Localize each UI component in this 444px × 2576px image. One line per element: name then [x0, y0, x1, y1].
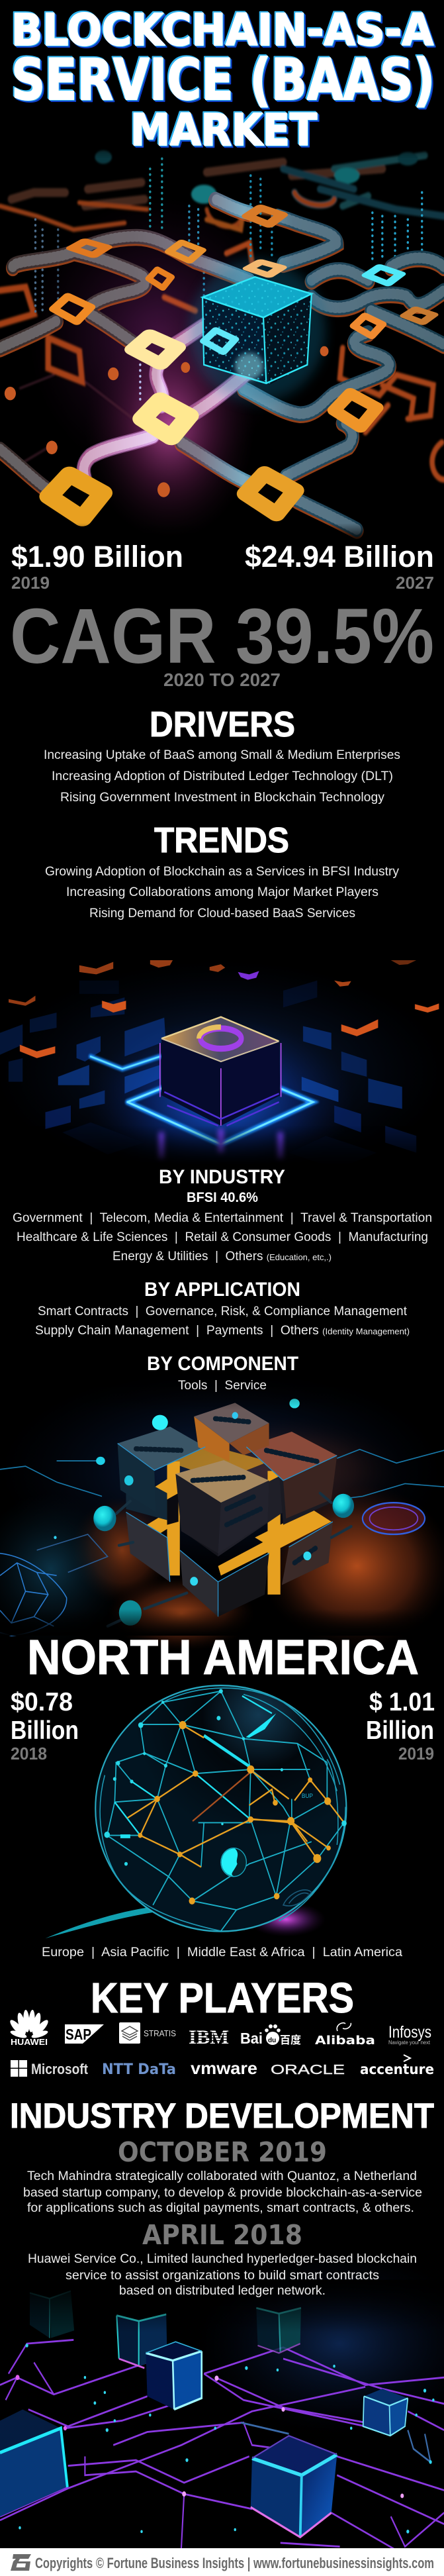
date: october 2019: OCTOBER 2019 [118, 2136, 327, 2168]
central cube [160, 1017, 281, 1160]
panel: drivers [44, 705, 400, 805]
trends list: Rising Demand for Cloud-based BaaS Services [89, 907, 355, 920]
footer bar [0, 2548, 444, 2576]
ring on cube top [199, 1027, 242, 1049]
logo: SAP: SAP [66, 2026, 91, 2043]
april 2018 description: service to assist organizations to build smart contracts [66, 2269, 379, 2283]
stat: north america 2018 [11, 1688, 79, 1763]
stat: market size 2027: 2027 [396, 573, 434, 593]
april 2018 description: Huawei Service Co., Limited launched hyperledger-based blockchain [28, 2252, 417, 2266]
application list [35, 1305, 410, 1338]
fade at bottom of cubes image [0, 1609, 444, 1636]
industry list: Healthcare & Life Sciences | Retail & Consumer Goods | Manufacturing [17, 1230, 428, 1244]
cyan network nodes [105, 1689, 347, 1866]
horizon arc [45, 1908, 159, 1938]
illustration: interlocked blockchain cubes [0, 1366, 444, 1652]
logo: accenture: accenture [360, 2061, 434, 2077]
panel: by application [35, 1279, 410, 1338]
drivers list [44, 748, 400, 805]
logo: baidu: du [268, 2037, 276, 2044]
orange network nodes [138, 1721, 331, 1905]
logo: infosys: Navigate your next [388, 2040, 431, 2046]
network lines [107, 1691, 344, 1931]
heading: by industry: BY INDUSTRY [159, 1166, 285, 1188]
panel: by component [147, 1353, 298, 1393]
logo: IBM: IBM [189, 2026, 229, 2048]
drivers list: Rising Government Investment in Blockchain Technology [60, 791, 385, 805]
panel: by industry [13, 1166, 432, 1263]
date: april 2018: APRIL 2018 [142, 2219, 302, 2251]
stat: market size 2019: $1.90 Billion [11, 540, 183, 573]
scattered dots [12, 2344, 435, 2534]
logo: infosys: Infosys [388, 2023, 431, 2042]
heading: drivers: DRIVERS [150, 705, 295, 744]
panel: key player logos [8, 2010, 434, 2078]
chain tubes [0, 199, 444, 531]
component list: Tools | Service [178, 1379, 267, 1393]
industry list [13, 1211, 432, 1263]
logo: baidu: 百度 [280, 2034, 301, 2046]
april 2018 description: based on distributed ledger network. [119, 2284, 326, 2298]
bright center cube [146, 2342, 202, 2409]
logo: huawei [8, 2010, 50, 2047]
globe body [95, 1685, 346, 1932]
trends list: Growing Adoption of Blockchain as a Services in BFSI Industry [45, 865, 399, 879]
logo: oracle: ORACLE [271, 2063, 345, 2077]
heading: trends: TRENDS [154, 820, 289, 860]
mid cube left [116, 2314, 167, 2368]
trends list: Increasing Collaborations among Major Market Players [66, 885, 378, 899]
logo: microsoft [11, 2060, 89, 2077]
faded teal cube right [256, 2308, 301, 2353]
stat: north america 2018: $0.78 [11, 1688, 73, 1716]
small orange nodes [5, 346, 328, 497]
stat: north america 2019: Billion [366, 1716, 434, 1745]
background glows [0, 1366, 444, 1652]
stat: north america 2019: 2019 [398, 1744, 434, 1763]
stat: market size 2027 [245, 540, 434, 593]
logo: baidu: Bai [240, 2030, 263, 2047]
heading: key players: KEY PLAYERS [91, 1974, 354, 2022]
panel: october 2019 development [23, 2136, 422, 2215]
april 2018 description [28, 2252, 417, 2298]
panel: trends [45, 820, 399, 920]
logo: NTT data: NTT DaTa [102, 2061, 176, 2078]
blue glow [0, 960, 444, 1187]
logo: alibaba: Alibaba [315, 2034, 375, 2048]
hero illustration: glowing blockchain network [0, 150, 444, 540]
hero fade bands [0, 132, 444, 939]
top fade over circuit [0, 2280, 444, 2332]
drivers list: Increasing Adoption of Distributed Ledger Technology (DLT) [52, 769, 393, 783]
faded teal cube [30, 2291, 74, 2338]
wireframe web [0, 1534, 108, 1636]
purple ring [363, 1503, 425, 1534]
logo: infosys [388, 2023, 431, 2046]
stat: north america 2019: $ 1.01 [369, 1688, 435, 1716]
title [11, 5, 435, 156]
panel: april 2018 development [28, 2219, 417, 2298]
october 2019 description: based startup company, to develop & provide blockchain-as-a-service [23, 2186, 422, 2200]
application list: Supply Chain Management | Payments | Others (Identity Management) [35, 1324, 410, 1338]
heading: by component: BY COMPONENT [147, 1353, 298, 1375]
logo: stratis: STRATIS [144, 2029, 176, 2038]
stat: market size 2019 [11, 540, 183, 593]
glowing lines [91, 1056, 313, 1144]
stat: market size 2019: 2019 [11, 573, 50, 593]
logo: accenture [360, 2055, 434, 2077]
title: MARKET [130, 105, 317, 156]
circuit lines [0, 1450, 444, 1499]
CAGR figure: 2020 TO 2027 [163, 669, 281, 690]
stat: north america 2018: 2018 [11, 1744, 47, 1763]
connector cables [108, 1493, 351, 1626]
heading: by application: BY APPLICATION [144, 1279, 300, 1301]
small cube right [363, 2389, 408, 2436]
logo: huawei: HUAWEI [11, 2037, 48, 2047]
globe rim lines [100, 1688, 345, 1931]
orange marks [9, 960, 439, 1058]
illustration: network globe [45, 1685, 347, 1938]
fade at top of cubes image [0, 1364, 444, 1411]
large cube left [0, 2409, 68, 2516]
label chip: BUP [302, 1793, 313, 1799]
purple base glow [246, 1902, 326, 1937]
cyan moon [221, 1848, 246, 1877]
october 2019 description: for applications such as digital payments, smart contracts, & others. [27, 2201, 414, 2215]
logo: microsoft: Microsoft [31, 2061, 89, 2077]
logo: alibaba [315, 2023, 375, 2048]
logo: baidu [240, 2024, 301, 2047]
block faces [118, 1403, 337, 1616]
footer logo [11, 2554, 31, 2571]
purple circuit lines [0, 2340, 444, 2550]
glowing blue block [190, 260, 326, 402]
large blue cube [251, 2436, 337, 2537]
cyan nodes [54, 1399, 354, 1626]
hero glow [28, 196, 289, 540]
heading: north america: NORTH AMERICA [27, 1630, 419, 1685]
stat: market size 2027: $24.94 Billion [245, 540, 434, 573]
logo: stratis [119, 2022, 176, 2044]
industry list: Government | Telecom, Media & Entertainment | Travel & Transportation [13, 1211, 432, 1225]
illustration: glowing cube on blue platform [0, 960, 444, 1187]
orange network lines [128, 1726, 344, 1867]
other regions list: Europe | Asia Pacific | Middle East & Africa | Latin America [42, 1946, 402, 1959]
background blocks [0, 981, 416, 1169]
october 2019 description: Tech Mahindra strategically collaborated with Quantoz, a Netherland [27, 2169, 417, 2183]
trends list [45, 865, 399, 920]
blurred distant chain links [0, 150, 444, 479]
application list: Smart Contracts | Governance, Risk, & Compliance Management [38, 1305, 408, 1318]
bright cyan beams [114, 1696, 276, 1836]
drivers list: Increasing Uptake of BaaS among Small & Medium Enterprises [44, 748, 400, 762]
october 2019 description [23, 2169, 422, 2215]
gold inner bars [142, 1442, 332, 1595]
dotted data streams [36, 159, 422, 402]
leading segment: BFSI 40.6% [187, 1190, 258, 1205]
chain link rings [49, 208, 433, 519]
logo: vmware: vmware [191, 2058, 257, 2078]
stat: north america 2019 [366, 1688, 435, 1763]
fade under cube image [0, 1126, 444, 1165]
dark circuitry textures [136, 1418, 317, 1563]
faint blue haze [199, 2254, 444, 2434]
industry list: Energy & Utilities | Others (Education, etc,.) [112, 1250, 332, 1263]
stat: north america 2018: Billion [11, 1716, 79, 1745]
illustration: glowing cubes on purple circuit [0, 2254, 444, 2550]
